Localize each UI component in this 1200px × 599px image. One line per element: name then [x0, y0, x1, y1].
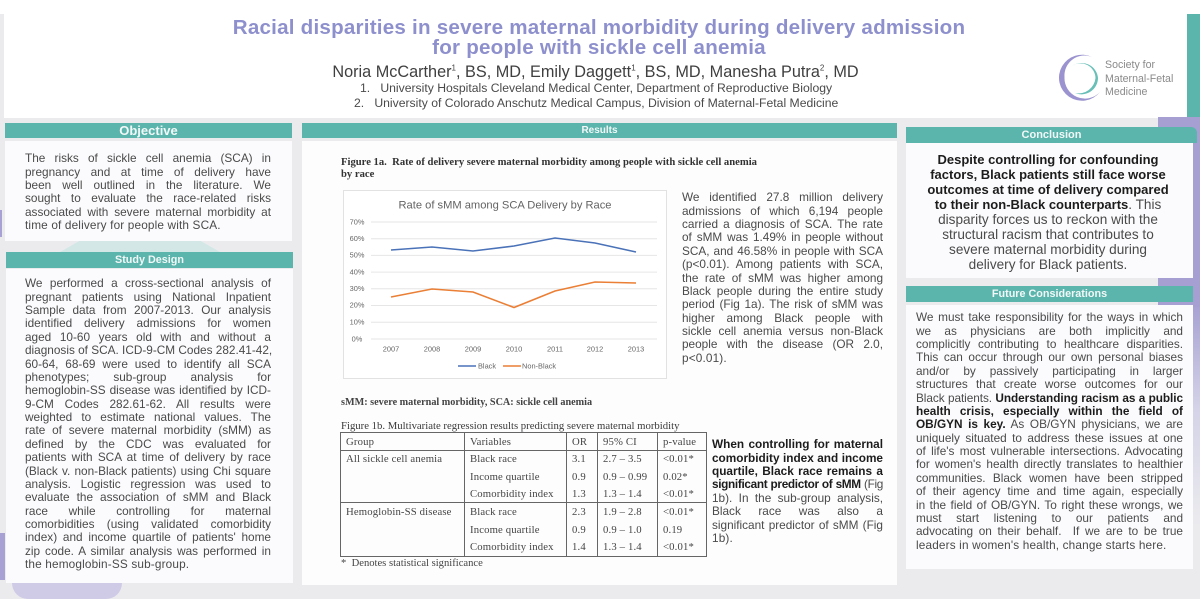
future considerations text: of their agency time and time again, especially: [916, 484, 1183, 498]
future considerations text: We must take responsibility for the ways in which: [916, 310, 1183, 324]
study design text: We performed a cross-sectional analysis of: [25, 276, 271, 290]
conclusion text: [927, 152, 1169, 272]
study design text: [25, 276, 272, 571]
objective text: been well outlined in the literature. We: [25, 178, 271, 192]
future considerations text: health crisis, especially within the field of: [916, 404, 1183, 418]
heading: conclusion: Conclusion: [1022, 129, 1081, 141]
title: [233, 16, 965, 59]
logo text: [1105, 59, 1173, 98]
series: Non-Black: [391, 282, 636, 308]
objective text: The risks of sickle cell anemia (SCA) in: [25, 151, 271, 165]
regression table: Hemoglobin-SS disease: [346, 506, 452, 518]
study design text: diagnosis of SCA. ICD-9-CM Codes 282.41-42,: [25, 343, 272, 357]
top white strip: [0, 0, 1200, 14]
y axis labels: [350, 218, 365, 344]
regression table: Variables: [470, 436, 511, 448]
objective text: associated with severe maternal morbidity at: [25, 205, 271, 219]
authors: Noria McCarther1, BS, MD, Emily Daggett1, BS, MD, Manesha Putra2, MD: [332, 63, 859, 81]
x axis labels: 2008: [424, 344, 440, 354]
conclusion text: disparity forces us to reckon with the: [938, 212, 1158, 226]
study design text: Sample data from 2007-2013. Our analysis: [25, 303, 271, 317]
regression table: Black race: [470, 453, 517, 465]
logo: society ring and name: [1059, 54, 1173, 101]
conclusion text: severe maternal morbidity during: [949, 242, 1147, 256]
study design text: the hemoglobin-SS sub-group.: [25, 557, 189, 571]
study design text: aged 10-60 years old with and without a: [25, 330, 271, 344]
panel: objective: [5, 123, 292, 241]
results text: [682, 190, 883, 365]
panel: conclusion: [906, 127, 1197, 278]
chart title: Rate of sMM among SCA Delivery by Race: [398, 200, 612, 212]
heading: results: Results: [581, 125, 618, 136]
regression table: <0.01*: [663, 453, 694, 465]
results text: sickle cell anemia versus non-Black: [682, 324, 883, 338]
future considerations text: advocating on their behalf. If we are to be true: [916, 524, 1183, 538]
figure 1a caption: Figure 1a. Rate of delivery severe maternal morbidity among people with sickle cell anemia: [341, 157, 757, 168]
results text: SCA, and 46.58% in people with SCA: [682, 244, 883, 258]
regression table: Comorbidity index: [470, 541, 554, 553]
results text: people with the disease (OR 2.0,: [682, 337, 883, 351]
regression table: [340, 432, 707, 557]
header band: [4, 0, 1187, 118]
x axis labels: 2013: [628, 344, 644, 354]
regression table: Group: [346, 436, 374, 448]
figure 1a caption: [341, 157, 757, 180]
legend: Black: [478, 362, 496, 370]
future considerations text: and/or by passively participating in larger: [916, 364, 1183, 378]
results text: of sMM was 1.49% in people without: [682, 230, 883, 244]
objective text: pregnancy and at time of delivery have: [25, 165, 271, 179]
logo text: Society for: [1105, 59, 1155, 71]
heading: study design: [6, 252, 293, 268]
regression table: 1.3: [572, 488, 586, 500]
regression table: 0.19: [663, 524, 682, 536]
y axis labels: 60%: [350, 234, 365, 243]
regression table: 1.9 – 2.8: [603, 506, 642, 518]
y axis labels: 10%: [350, 318, 365, 326]
panel: results: [302, 123, 897, 585]
study design text: hemoglobin-SS disease was identified by ICD-: [25, 383, 271, 397]
side accent: lavender fade: [1193, 307, 1200, 599]
affiliations: [354, 81, 838, 110]
study design text: pregnant patients using National Inpatient: [25, 290, 271, 304]
study design text: identified delivery admissions for women: [25, 316, 271, 330]
legend: [458, 362, 556, 370]
study design text: weighted to estimate national values. The: [25, 410, 271, 424]
heading: future considerations: [906, 286, 1193, 302]
regression table: <0.01*: [663, 488, 694, 500]
study design text: evaluate the association of sMM and Black: [25, 490, 271, 504]
objective text: time of delivery for people with SCA.: [25, 218, 221, 232]
future considerations text: Black patients. Understanding racism as a public: [916, 391, 1183, 405]
y axis labels: 40%: [350, 268, 365, 276]
regression table: 3.1: [572, 453, 586, 465]
side accent: left lavender: [0, 533, 5, 580]
heading: results: [302, 123, 897, 138]
footnote: * Denotes statistical significance: [341, 558, 483, 569]
results text: Black people during the entire study: [682, 284, 883, 298]
conclusion text: Despite controlling for confounding: [938, 152, 1158, 166]
y axis labels: 30%: [350, 284, 365, 293]
regression findings text: Black race was also a: [712, 504, 883, 518]
x axis labels: 2010: [506, 344, 522, 354]
regression findings text: significant predictor of sMM (Fig: [712, 477, 883, 491]
regression table: Income quartile: [470, 470, 540, 482]
x axis labels: 2009: [465, 344, 481, 354]
x axis labels: 2007: [383, 344, 399, 354]
conclusion text: outcomes at time of delivery compared: [927, 182, 1169, 196]
heading: objective: Objective: [119, 123, 178, 138]
decorative teal arc: [60, 241, 220, 252]
regression findings text: comorbidity index and income: [712, 451, 883, 465]
study design text: 60-64, 68-69 were used to identify all SCA: [25, 357, 271, 371]
future considerations text: [916, 310, 1183, 552]
regression table: OR: [572, 436, 587, 448]
logo text: Medicine: [1105, 86, 1147, 98]
conclusion text: factors, Black patients still face worse: [930, 166, 1166, 182]
regression table: All sickle cell anemia: [346, 453, 442, 465]
y axis labels: 20%: [350, 300, 365, 310]
study design text: phenotypes; sub-group analysis for: [25, 370, 271, 384]
regression table: 1.4: [572, 541, 586, 553]
results text: p<0.01).: [682, 351, 727, 365]
study design text: zip code. A similar analysis was performed in: [25, 544, 271, 558]
regression table: 0.9: [572, 524, 586, 536]
results text: admissions of which 6,194 people: [682, 204, 883, 218]
affiliations: 1. University Hospitals Cleveland Medical Center, Department of Reproductive Biology: [360, 81, 832, 95]
decorative lavender disc: [12, 583, 122, 599]
results text: higher among Black people with: [682, 311, 883, 325]
future considerations text: structures that create worse outcomes for our: [916, 377, 1183, 391]
future considerations text: uniquely situated to address these issues at one: [916, 431, 1183, 445]
study design text: comorbidities (using validated comorbidity: [25, 517, 271, 531]
heading: future considerations: Future Considerations: [992, 288, 1107, 300]
future considerations text: we as physicians are both implicitly and: [916, 324, 1183, 338]
study design text: defined by the CDC was evaluated for: [25, 437, 271, 451]
regression table: Black race: [470, 506, 517, 518]
future considerations text: complicitly contributing to healthcare disparities.: [916, 337, 1183, 351]
results text: (p<0.01). Among patients with SCA,: [682, 257, 883, 271]
study design text: patients with SCA at time of delivery by race: [25, 450, 271, 464]
figure 1b caption: Figure 1b. Multivariate regression results predicting severe maternal morbidity: [341, 420, 679, 432]
future considerations text: must start listening to our patients and: [916, 511, 1183, 525]
side accent: lavender band: [1158, 117, 1200, 307]
panel: study design: [6, 252, 293, 583]
future considerations text: This can occur through our own personal biases: [916, 350, 1183, 364]
heading: conclusion: [906, 127, 1197, 143]
regression findings text: significant predictor of sMM (Fig: [712, 518, 883, 532]
logo text: Maternal-Fetal: [1105, 72, 1173, 84]
regression table: 0.9: [572, 470, 586, 482]
side accent: teal bar: [1187, 14, 1200, 120]
heading: study design: Study Design: [115, 254, 184, 266]
x axis labels: 2012: [587, 344, 603, 354]
conclusion text: to their non-Black counterparts. This: [935, 196, 1161, 212]
study design text: (Black v. non-Black patients) using Chi square: [25, 464, 271, 478]
affiliations: 2. University of Colorado Anschutz Medical Campus, Division of Maternal-Fetal Medicine: [354, 96, 838, 110]
title: for people with sickle cell anemia: [432, 36, 766, 59]
x axis labels: 2011: [547, 344, 563, 354]
study design text: race while controlling for maternal: [25, 504, 271, 518]
conclusion text: delivery for Black patients.: [969, 256, 1127, 272]
regression findings text: quartile, Black race remains a: [712, 464, 883, 478]
side accent: left lavender upper: [0, 210, 2, 237]
regression table: 0.9 – 1.0: [603, 524, 642, 536]
heading: objective: [5, 123, 292, 138]
regression findings text: When controlling for maternal: [712, 437, 883, 451]
regression table: 0.02*: [663, 470, 688, 482]
study design text: index) and income quartile of patients' home: [25, 530, 271, 544]
regression table: p-value: [663, 436, 696, 448]
abbreviations note: sMM: severe maternal morbidity, SCA: sickle cell anemia: [341, 397, 592, 408]
regression findings text: 1b). In the sub-group analysis,: [712, 491, 883, 505]
icon: ring: [1059, 54, 1100, 101]
future considerations text: for women's health directly translates to healthier: [916, 457, 1183, 471]
future considerations text: of life's most vulnerable intersections. Advocating: [916, 444, 1183, 458]
future considerations text: communities. Black women have been stripped: [916, 471, 1183, 485]
regression table: 1.3 – 1.4: [603, 541, 642, 553]
regression table: 2.7 – 3.5: [603, 453, 642, 465]
regression table: Income quartile: [470, 524, 540, 536]
regression table: 2.3: [572, 506, 586, 518]
future considerations text: in the field of OB/GYN. To right these wrongs, we: [916, 498, 1183, 512]
y axis labels: 0%: [352, 334, 363, 344]
future considerations text: leaders in women's health, change starts here.: [916, 538, 1166, 552]
regression table: <0.01*: [663, 506, 694, 518]
y axis labels: 50%: [350, 250, 365, 260]
title: Racial disparities in severe maternal morbidity during delivery admission: [233, 16, 965, 39]
panel: future considerations: [906, 286, 1193, 569]
results text: We identified 27.8 million delivery: [682, 190, 883, 204]
line chart: rate of sMM by race: [343, 190, 667, 379]
y axis labels: 70%: [350, 218, 365, 226]
conclusion text: structural racism that contributes to: [942, 226, 1154, 242]
legend: Non-Black: [522, 362, 556, 370]
results text: the rate of sMM was higher among: [682, 271, 883, 285]
results text: period (Fig 1a). The risk of sMM was: [682, 297, 883, 311]
regression findings text: 1b).: [712, 531, 733, 545]
results text: carried a diagnosis of SCA. The rate: [682, 217, 883, 231]
regression findings text: [712, 437, 883, 545]
objective text: sought to evaluate the race-related risks: [25, 191, 271, 205]
future considerations text: OB/GYN is key. As OB/GYN physicians, we are: [916, 417, 1183, 431]
regression table: <0.01*: [663, 541, 694, 553]
regression table: 95% CI: [603, 436, 637, 448]
study design text: rate of severe maternal morbidity (sMM) as: [25, 423, 271, 437]
regression table: 0.9 – 0.99: [603, 470, 647, 482]
objective text: [25, 151, 271, 232]
regression table: 1.3 – 1.4: [603, 488, 642, 500]
x axis labels: [383, 344, 644, 354]
series: Black: [391, 238, 636, 252]
study design text: 9-CM Codes 282.61-62. All results were: [25, 397, 271, 411]
study design text: analysis. Logistic regression was used to: [25, 477, 271, 491]
regression table: Comorbidity index: [470, 488, 554, 500]
figure 1a caption: by race: [341, 169, 374, 180]
